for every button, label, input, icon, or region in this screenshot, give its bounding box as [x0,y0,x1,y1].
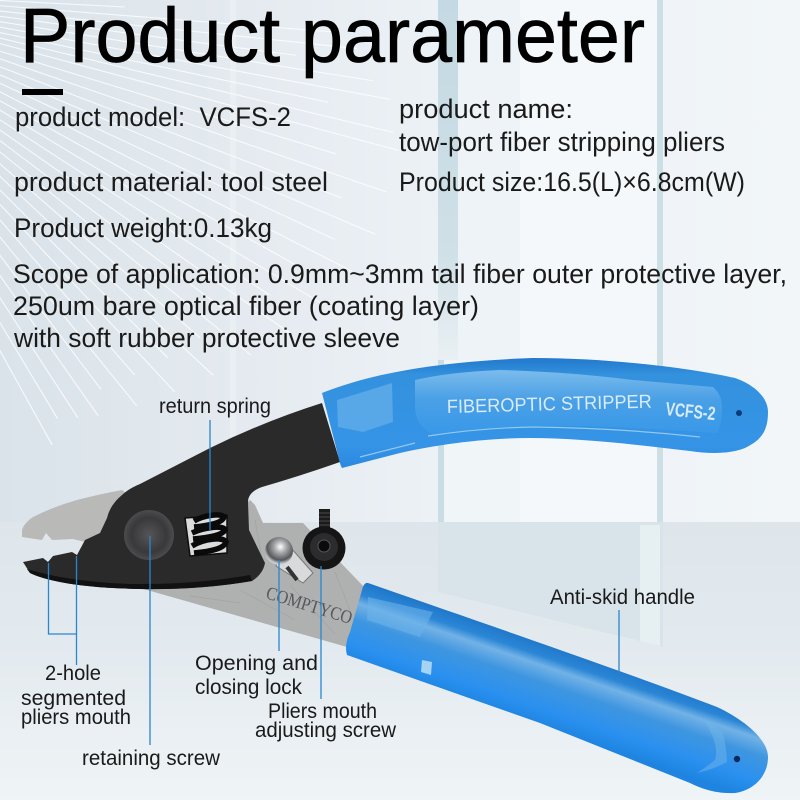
product name: product name: [399,94,573,124]
callout labels [21,395,695,770]
product model: product model: VCFS-2 [15,102,291,132]
pliers mouth adjusting screw [302,509,346,570]
product name: tow-port fiber stripping pliers [399,127,725,157]
product material: product material: tool steel [14,167,328,197]
lower blade silver [140,500,365,647]
label: retaining screw: retaining screw [82,747,221,770]
opening and closing lock [265,537,313,583]
label: 2-hole segmented pliers mouth: pliers mouth [21,706,131,729]
scope of application: with soft rubber protective sleeve [13,323,400,353]
jaw shadow [27,569,252,589]
return spring [185,515,227,556]
scope of application: 250um bare optical fiber (coating layer) [13,291,479,321]
handle lettering: FIBEROPTIC STRIPPER [447,392,652,418]
label: 2-hole segmented pliers mouth: 2-hole [45,662,101,685]
label: anti-skid handle: Anti-skid handle [550,586,695,609]
upper handle: VCFS-2 [664,399,716,425]
scope of application: Scope of application: 0.9mm~3mm tail fiber outer protective layer, [13,259,787,289]
label: opening and closing lock: Opening and [195,652,318,675]
label: pliers mouth adjusting screw [255,700,397,742]
callout leader lines [48,420,619,745]
brand mark: COMPTYCO [264,584,354,629]
label: pliers mouth adjusting screw: Pliers mouth [268,700,377,723]
label: opening and closing lock [195,652,318,699]
label: return spring: return spring [159,395,271,418]
product name [399,94,725,157]
product size: Product size:16.5(L)×6.8cm(W) [399,167,745,197]
pliers [22,358,768,793]
light rays [0,0,399,445]
product weight: Product weight:0.13kg [14,213,272,243]
label: pliers mouth adjusting screw: adjusting screw [255,719,397,742]
title underline [22,89,63,95]
label: opening and closing lock: closing lock [195,676,302,699]
scope of application [13,259,787,353]
label: 2-hole segmented pliers mouth [21,662,131,729]
upper handle [322,358,768,468]
label: 2-hole segmented pliers mouth: segmented [21,687,126,710]
retaining screw disc [124,510,174,560]
parameter list [13,94,787,353]
lower handle [346,583,768,793]
black body [23,403,340,589]
upper jaw silver blade [22,490,135,542]
blade hatching [190,520,352,634]
